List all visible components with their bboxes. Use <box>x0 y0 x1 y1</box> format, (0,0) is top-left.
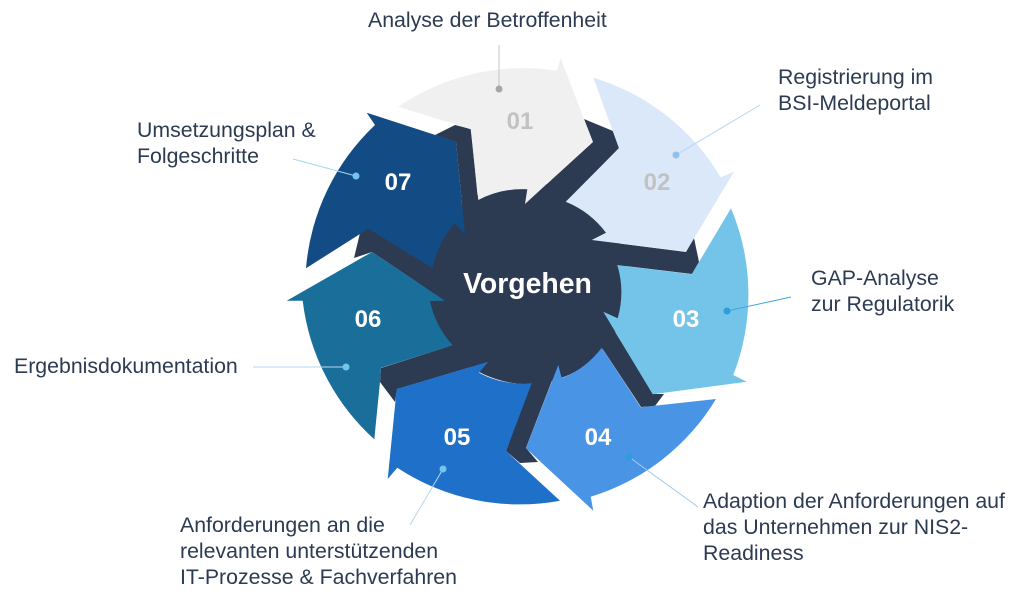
number 07: 07 <box>385 169 411 196</box>
label 07: Folgeschritte <box>137 144 259 168</box>
leader 03 <box>724 297 791 314</box>
label 02: BSI-Meldeportal <box>778 91 931 115</box>
leader 05 <box>410 466 446 525</box>
arrow segment 01 <box>398 58 593 204</box>
arrow segment 04 <box>526 348 716 511</box>
number 03: 03 <box>673 306 699 333</box>
arrow segment 06 <box>287 252 453 439</box>
number 01: 01 <box>507 108 533 135</box>
leader 02 <box>672 105 760 158</box>
label 03: GAP-Analyse <box>811 266 939 290</box>
number 04: 04 <box>585 424 612 451</box>
label 05: relevanten unterstützenden <box>180 539 438 563</box>
label 03: zur Regulatorik <box>811 292 955 316</box>
arrow segment 03 <box>603 208 748 394</box>
leader 06 <box>253 364 350 370</box>
arrow segment 05 <box>388 362 560 504</box>
leader 04 <box>626 454 698 507</box>
label 05: Anforderungen an die <box>180 513 385 537</box>
label 04: Adaption der Anforderungen auf <box>703 489 1005 513</box>
number 05: 05 <box>444 424 470 451</box>
leader 01 <box>496 45 502 92</box>
number 02: 02 <box>644 169 670 196</box>
number 06: 06 <box>355 306 381 333</box>
label 07: Umsetzungsplan & <box>137 118 316 142</box>
label 04: das Unternehmen zur NIS2- <box>703 515 968 539</box>
label 05: IT-Prozesse & Fachverfahren <box>180 565 457 589</box>
centre title: Vorgehen <box>463 268 592 300</box>
arrow segment 07 <box>306 113 465 268</box>
arrow segment 02 <box>566 78 734 252</box>
leader 07 <box>293 159 360 180</box>
label 01: Analyse der Betroffenheit <box>368 8 607 32</box>
label 02: Registrierung im <box>778 65 933 89</box>
label 04: Readiness <box>703 541 804 565</box>
dark centre hub with arrow shadows <box>354 119 699 463</box>
label 06: Ergebnisdokumentation <box>14 354 238 378</box>
